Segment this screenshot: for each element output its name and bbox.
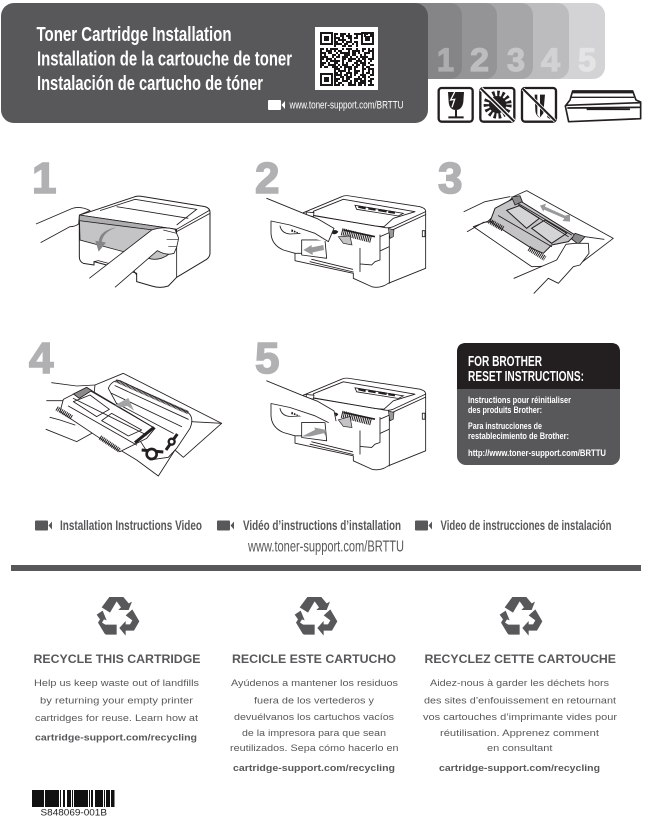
printer with drum inserted bbox=[267, 378, 426, 470]
divider bar bbox=[11, 565, 641, 571]
body: vos cartouches d’imprimante vides pour bbox=[423, 712, 618, 723]
body: cartridge-support.com/recycling bbox=[439, 763, 600, 774]
reset heading: RESET INSTRUCTIONS: bbox=[468, 369, 584, 385]
title in three languages bbox=[36, 24, 292, 95]
header tabs with step numbers: 1 bbox=[437, 42, 454, 78]
QR code bbox=[315, 27, 378, 90]
reset text: Instructions pour réinitialiser bbox=[468, 395, 571, 405]
body: devuélvanos los cartuchos vacíos bbox=[234, 712, 394, 723]
reset text: Para instrucciones de bbox=[468, 421, 542, 431]
step number 1: 1 bbox=[32, 154, 56, 203]
icon: recycle bbox=[500, 597, 542, 636]
header url: www.toner-support.com/BRTTU bbox=[289, 100, 404, 112]
icon: toner cartridge bbox=[565, 91, 641, 122]
barcode bbox=[32, 790, 114, 818]
header tabs with step numbers: 3 bbox=[507, 42, 525, 78]
reset heading: FOR BROTHER bbox=[468, 354, 542, 370]
body: Help us keep waste out of landfills bbox=[34, 678, 199, 689]
video captions: Vidéo d’instructions d’installation bbox=[243, 518, 401, 533]
header tabs with step numbers: 4 bbox=[541, 42, 560, 78]
video url: www.toner-support.com/BRTTU bbox=[247, 538, 404, 556]
video icon bbox=[268, 100, 285, 110]
step number 4: 4 bbox=[29, 334, 54, 383]
printer with cover opening bbox=[36, 196, 210, 287]
body: des sites d’enfouissement en retournant bbox=[424, 696, 616, 706]
reset heading bbox=[468, 354, 584, 385]
step 5 bbox=[255, 334, 426, 470]
step number 5: 5 bbox=[255, 334, 279, 383]
heading: RECYCLEZ CETTE CARTOUCHE bbox=[424, 654, 616, 666]
step 3 bbox=[438, 154, 613, 293]
body: Aidez-nous à garder les déchets hors bbox=[430, 678, 609, 689]
heading: RECYCLE THIS CARTRIDGE bbox=[34, 654, 201, 666]
panel: recycle spanish bbox=[230, 597, 398, 774]
icon: recycle bbox=[97, 597, 139, 636]
icon: no light exposure bbox=[480, 88, 514, 122]
header tabs with step numbers: 2 bbox=[470, 42, 489, 78]
panel: recycle english bbox=[34, 597, 201, 744]
shaking the toner cartridge bbox=[464, 191, 613, 293]
title in three languages: Toner Cartridge Installation bbox=[36, 24, 232, 46]
reset text: http://www.toner-support.com/BRTTU bbox=[468, 448, 606, 458]
step 2 bbox=[255, 154, 426, 287]
step 1 bbox=[32, 154, 210, 287]
body: fuera de los vertederos y bbox=[254, 696, 374, 706]
video captions bbox=[35, 518, 612, 533]
icon: do not touch drum bbox=[522, 88, 556, 122]
body: reutilizados. Sepa cómo hacerlo en bbox=[230, 743, 398, 754]
body: Ayúdenos a mantener los residuos bbox=[231, 678, 398, 689]
icon: fragile bbox=[439, 88, 473, 122]
body: cartridge-support.com/recycling bbox=[35, 732, 197, 744]
reset text bbox=[468, 395, 606, 458]
panel: reset instructions bbox=[457, 343, 620, 465]
body: réutilisation. Apprenez comment bbox=[440, 728, 599, 739]
body: by returning your empty printer bbox=[40, 696, 194, 706]
body bbox=[34, 678, 199, 744]
barcode: S848069-001B bbox=[40, 808, 107, 818]
step number 3: 3 bbox=[438, 154, 462, 203]
video captions: Installation Instructions Video bbox=[60, 518, 202, 533]
body: cartridge-support.com/recycling bbox=[233, 763, 395, 774]
header tabs with step numbers: 5 bbox=[578, 42, 596, 78]
icon: recycle bbox=[295, 597, 337, 636]
body: cartridges for reuse. Learn how at bbox=[35, 713, 198, 724]
step number 2: 2 bbox=[255, 154, 279, 203]
body bbox=[230, 678, 398, 774]
heading: RECICLE ESTE CARTUCHO bbox=[232, 654, 396, 666]
panel: recycle french bbox=[423, 597, 618, 774]
header panel bbox=[1, 3, 428, 123]
body: de la impresora para que sean bbox=[242, 728, 386, 739]
printer with drum removal bbox=[267, 196, 426, 287]
header tabs with step numbers bbox=[400, 3, 605, 79]
reset text: restablecimiento de Brother: bbox=[468, 431, 569, 441]
title in three languages: Installation de la cartouche de toner bbox=[37, 48, 292, 70]
reset text: des produits Brother: bbox=[468, 405, 542, 415]
title in three languages: Instalación de cartucho de tóner bbox=[37, 73, 263, 95]
body bbox=[423, 678, 618, 774]
cartridge into drum unit bbox=[46, 373, 222, 476]
body: en consultant bbox=[487, 743, 553, 754]
step 4 bbox=[29, 334, 222, 476]
